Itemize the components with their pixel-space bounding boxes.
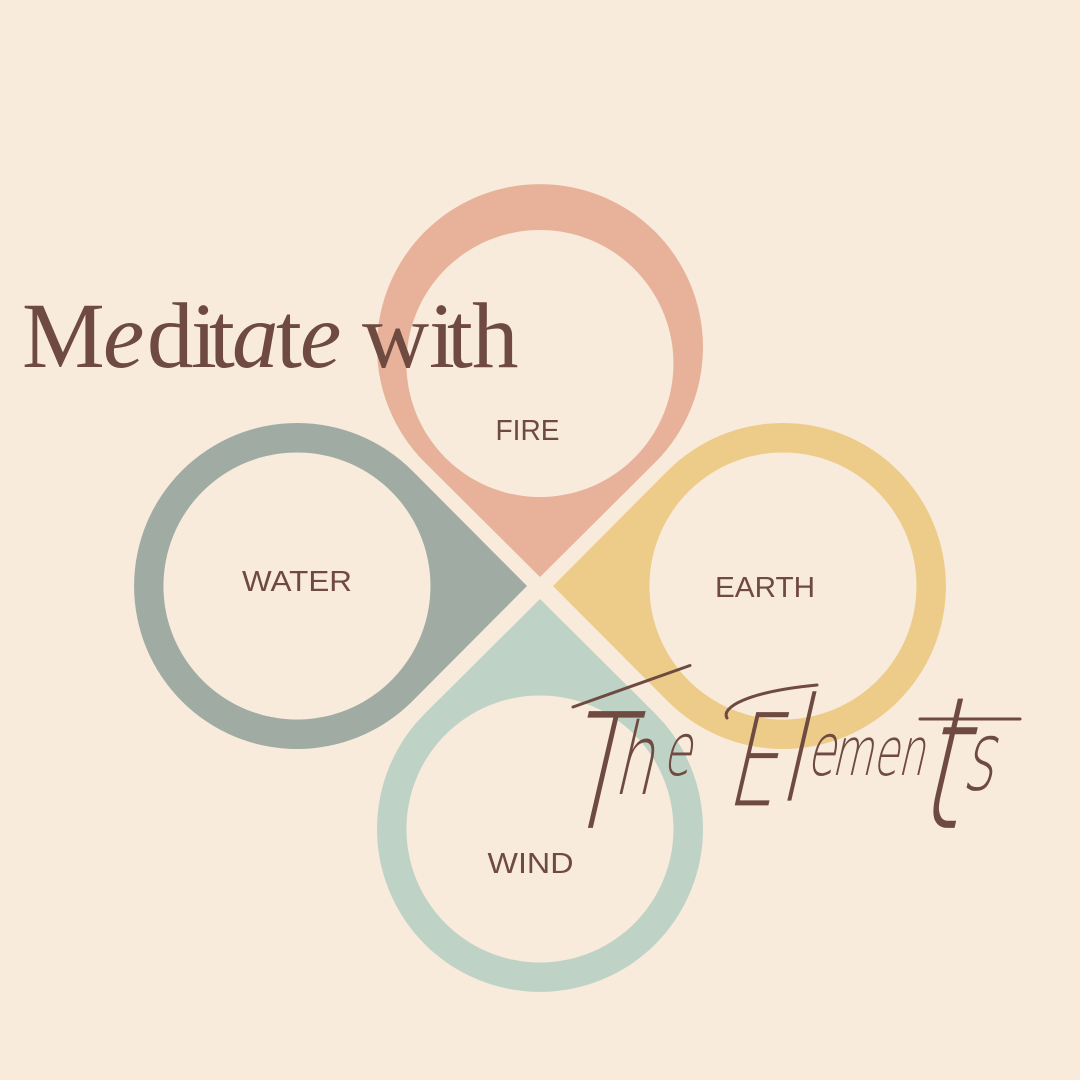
panel: fire teardrop xyxy=(377,184,703,577)
title: The Elements: t xyxy=(905,657,999,871)
label: water: WATER xyxy=(242,566,352,598)
flourish: E swash xyxy=(726,685,817,718)
title: Meditate with: h xyxy=(472,285,518,388)
title: Meditate with: e xyxy=(103,285,144,388)
title: The Elements: e xyxy=(658,707,721,793)
title: The Elements: n xyxy=(893,714,938,791)
title: The Elements: s xyxy=(956,701,1013,813)
title: The Elements: h xyxy=(607,702,673,818)
title: Meditate with: i xyxy=(429,285,455,388)
panel: wind teardrop xyxy=(377,599,703,992)
label: wind: WIND xyxy=(488,848,574,880)
title: Meditate with: t xyxy=(276,285,302,388)
title: The Elements: l xyxy=(769,666,833,835)
title: Meditate with: a xyxy=(232,285,278,388)
title: Meditate with: M xyxy=(22,285,105,388)
flourish: t crossbar xyxy=(920,718,1020,720)
flourish: T swash xyxy=(573,666,690,707)
title: Meditate with: i xyxy=(191,285,217,388)
title: Meditate with: t xyxy=(447,285,473,388)
title: Meditate with: t xyxy=(209,285,235,388)
title: The Elements: E xyxy=(718,687,803,836)
title: Meditate with: e xyxy=(300,285,341,388)
label: earth: EARTH xyxy=(715,572,815,604)
title: The Elements: T xyxy=(551,681,655,867)
title: The Elements: e xyxy=(802,707,850,793)
title: The Elements xyxy=(550,657,1023,871)
element diagram xyxy=(134,184,946,992)
title: The Elements: e xyxy=(868,714,912,791)
panel: water teardrop xyxy=(134,423,527,749)
panel: earth teardrop xyxy=(553,423,946,749)
title: Meditate with: w xyxy=(362,285,429,388)
title: The Elements: m xyxy=(827,714,886,791)
title: Meditate with: d xyxy=(147,285,194,388)
label: fire: FIRE xyxy=(496,415,560,447)
